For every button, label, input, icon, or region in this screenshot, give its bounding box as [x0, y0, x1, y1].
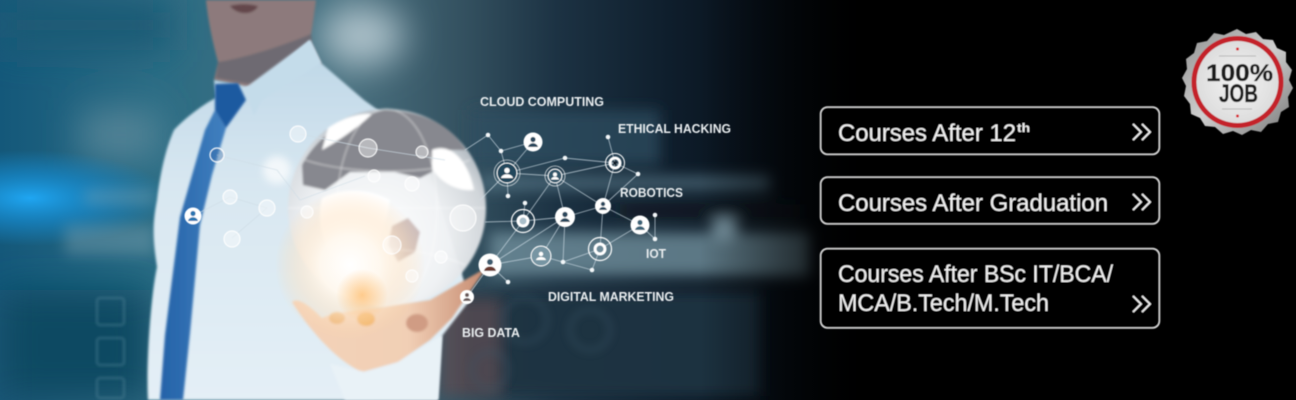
label: ethical hacking: ETHICAL HACKING — [618, 121, 731, 136]
nodes on shirt and globe — [210, 126, 476, 282]
badge: 100% job: JOB — [1219, 80, 1258, 108]
network of connected nodes — [184, 126, 657, 304]
connection lines — [193, 134, 655, 297]
background: blurred teal to black — [0, 0, 818, 400]
button: courses after bsc it: MCA/B.Tech/M.Tech — [838, 290, 1049, 317]
face and neck — [206, 0, 322, 90]
label: iot: IOT — [646, 246, 666, 261]
badge: 100% job: 100% — [1206, 60, 1273, 87]
topic labels — [462, 94, 731, 340]
small dots — [486, 133, 657, 284]
glow — [275, 190, 425, 340]
ringed person nodes — [494, 160, 565, 266]
tie — [160, 83, 246, 400]
shirt — [147, 40, 470, 400]
globe on hand — [263, 109, 486, 400]
man in shirt and tie — [147, 0, 470, 400]
button: courses after bsc it: Courses After BSc IT/BCA/ — [838, 261, 1113, 288]
label: digital marketing: DIGITAL MARKETING — [548, 289, 674, 304]
hand — [292, 268, 486, 400]
gear nodes — [512, 154, 624, 260]
globe — [288, 109, 486, 307]
collar shadow — [245, 40, 321, 116]
label: big data: BIG DATA — [462, 325, 521, 340]
button: courses after 12th: Courses After 12 — [838, 120, 1016, 147]
button: courses after graduation: Courses After Graduation — [838, 190, 1108, 217]
label: cloud computing: CLOUD COMPUTING — [480, 94, 604, 109]
button: courses after 12th — [820, 107, 1160, 154]
button: courses after 12th: th — [1017, 121, 1030, 135]
person nodes filled — [184, 132, 650, 304]
badge: 100% job — [1182, 29, 1293, 135]
button: courses after bsc it — [820, 248, 1160, 328]
label: robotics: ROBOTICS — [620, 185, 683, 200]
button: courses after graduation — [820, 177, 1160, 224]
